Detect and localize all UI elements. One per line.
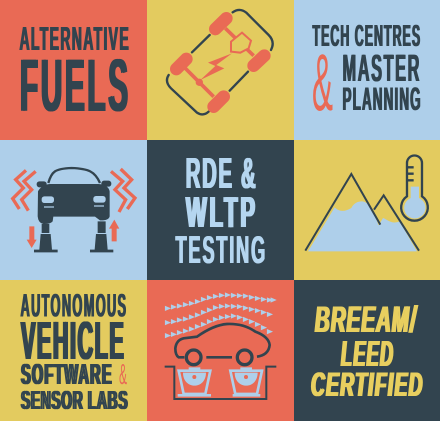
icon: mountains and thermometer bbox=[305, 155, 428, 251]
heading: planning: PLANNING bbox=[342, 83, 420, 118]
heading: fuels: FUELS bbox=[19, 44, 127, 127]
heading: wltp: WLTP bbox=[185, 189, 254, 237]
panel: tech centres and master planning: & bbox=[312, 38, 333, 128]
heading: breeam: BREEAM/ bbox=[314, 300, 416, 341]
icon: car in wind tunnel bbox=[165, 293, 276, 399]
icon: car on shaker rig bbox=[13, 168, 135, 252]
heading: tech centres: TECH CENTRES bbox=[312, 20, 420, 54]
panel: breeam leed certified bbox=[294, 280, 440, 421]
panel: electric chassis bbox=[147, 0, 294, 140]
heading: master: MASTER bbox=[342, 49, 419, 90]
car outline bbox=[165, 324, 276, 399]
heading: certified: CERTIFIED bbox=[310, 365, 422, 403]
heading: autonomous: AUTONOMOUS bbox=[20, 289, 126, 324]
airflow arrows bbox=[165, 293, 276, 338]
panel: rde and wltp testing bbox=[147, 140, 294, 280]
panel: vibration rig bbox=[0, 140, 147, 280]
panel: wind tunnel bbox=[147, 280, 294, 421]
heading: testing: TESTING bbox=[175, 228, 265, 272]
heading: rde and: RDE & bbox=[185, 149, 255, 198]
heading: software: SOFTWARE bbox=[20, 357, 110, 390]
icon: electric chassis bbox=[167, 10, 273, 114]
panel: altitude and temperature bbox=[294, 140, 440, 280]
heading: leed: LEED bbox=[340, 334, 392, 375]
panel: autonomous vehicle labs: & bbox=[119, 359, 127, 391]
panel: autonomous vehicle labs bbox=[0, 280, 147, 421]
heading: alternative: ALTERNATIVE bbox=[19, 21, 128, 58]
rollers bbox=[178, 367, 262, 397]
heading: sensor labs: SENSOR LABS bbox=[20, 387, 127, 415]
panel: alternative fuels bbox=[0, 0, 147, 140]
panel: tech centres and master planning bbox=[294, 0, 440, 140]
heading: vehicle: VEHICLE bbox=[20, 310, 123, 371]
